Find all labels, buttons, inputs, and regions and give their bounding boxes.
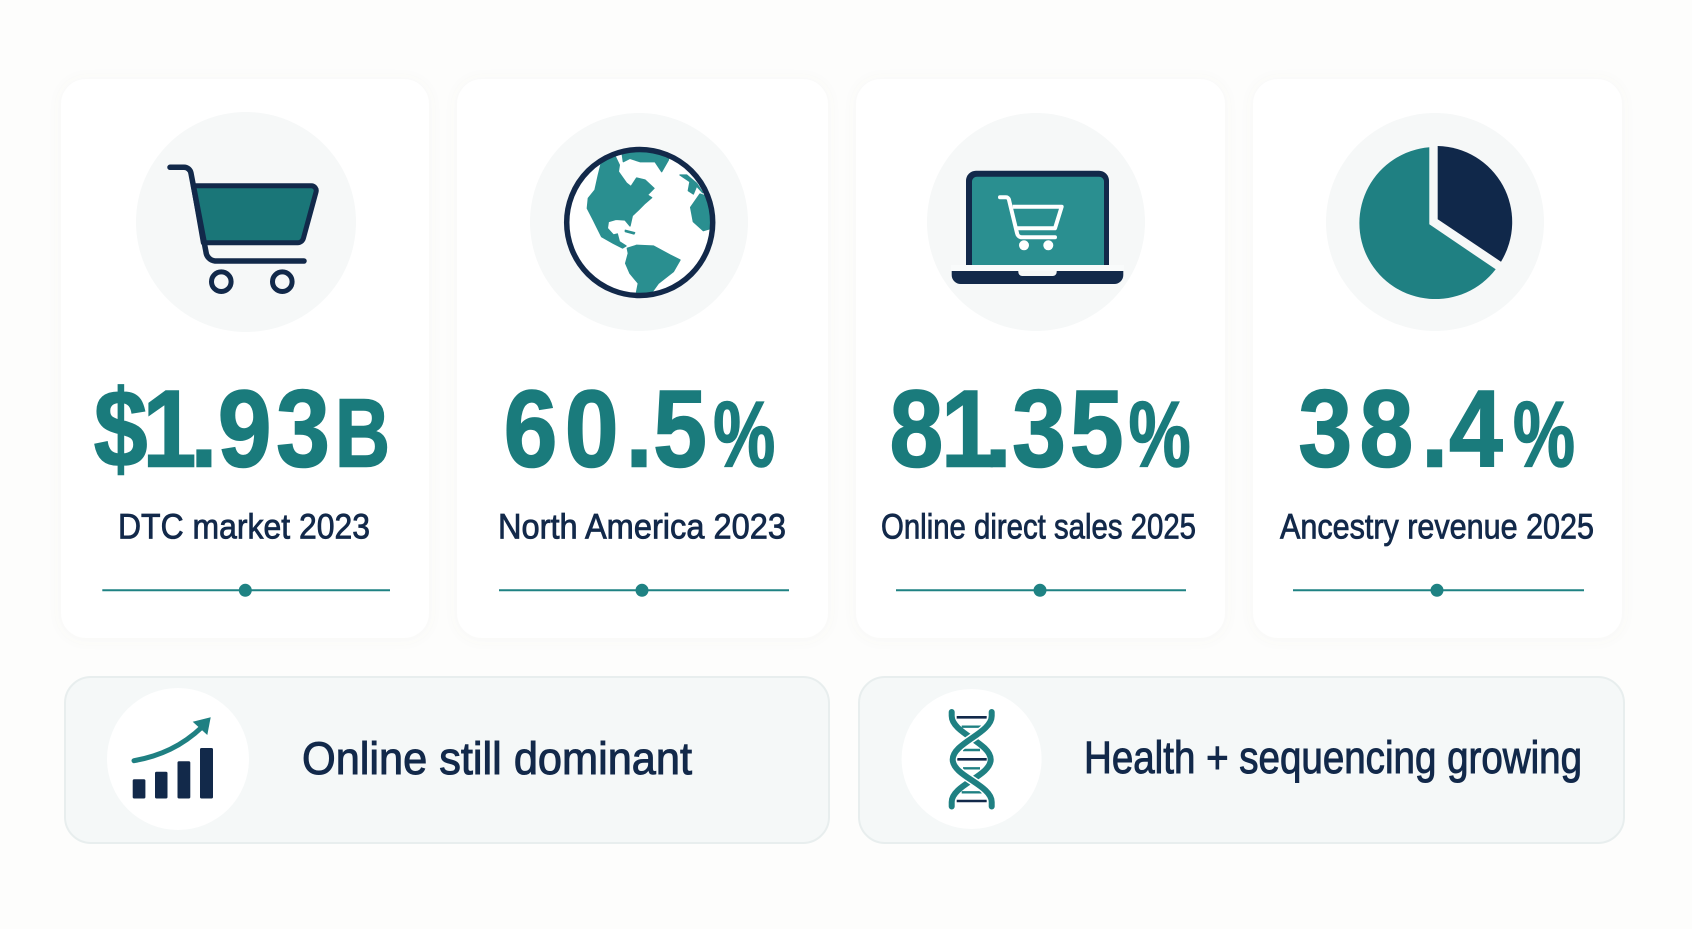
label: DTC market 2023: DTC market 2023 [118, 508, 370, 546]
panel: Ancestry revenue [1253, 79, 1622, 638]
stat value: 81.35%: 81.35 [890, 367, 1124, 490]
icon: DNA helix [952, 712, 992, 806]
icon: shopping cart [170, 167, 316, 292]
text: Online still dominant: Online still dominant [302, 733, 692, 784]
stat value: $1.93B: $1.93 [94, 367, 330, 490]
icon: globe [567, 147, 717, 296]
panel: Online direct sales [856, 79, 1225, 638]
stat value: 38.4%: % [1513, 382, 1575, 486]
panel: North America [499, 146, 789, 597]
label: Ancestry revenue 2025: Ancestry revenue 2025 [1280, 508, 1594, 546]
icon: laptop with cart [951, 171, 1124, 284]
icon: rising bar chart with arrow [133, 717, 213, 798]
stat value: 60.5%: % [713, 382, 775, 486]
stat value: 81.35%: % [1129, 382, 1191, 486]
icon: pie chart [1359, 146, 1512, 299]
panel: Health + sequencing growing [859, 677, 1624, 843]
panel: DTC market [61, 79, 429, 638]
label: Online direct sales 2025: Online direct sales 2025 [881, 508, 1196, 546]
panel: Online still dominant [65, 677, 829, 843]
label: North America 2023: North America 2023 [498, 508, 786, 546]
stat value: 38.4%: 38.4 [1298, 367, 1503, 490]
stat value: 60.5%: 60.5 [504, 367, 707, 490]
stat value: $1.93B: B [335, 378, 390, 488]
text: Health + sequencing growing: Health + sequencing growing [1084, 732, 1582, 783]
